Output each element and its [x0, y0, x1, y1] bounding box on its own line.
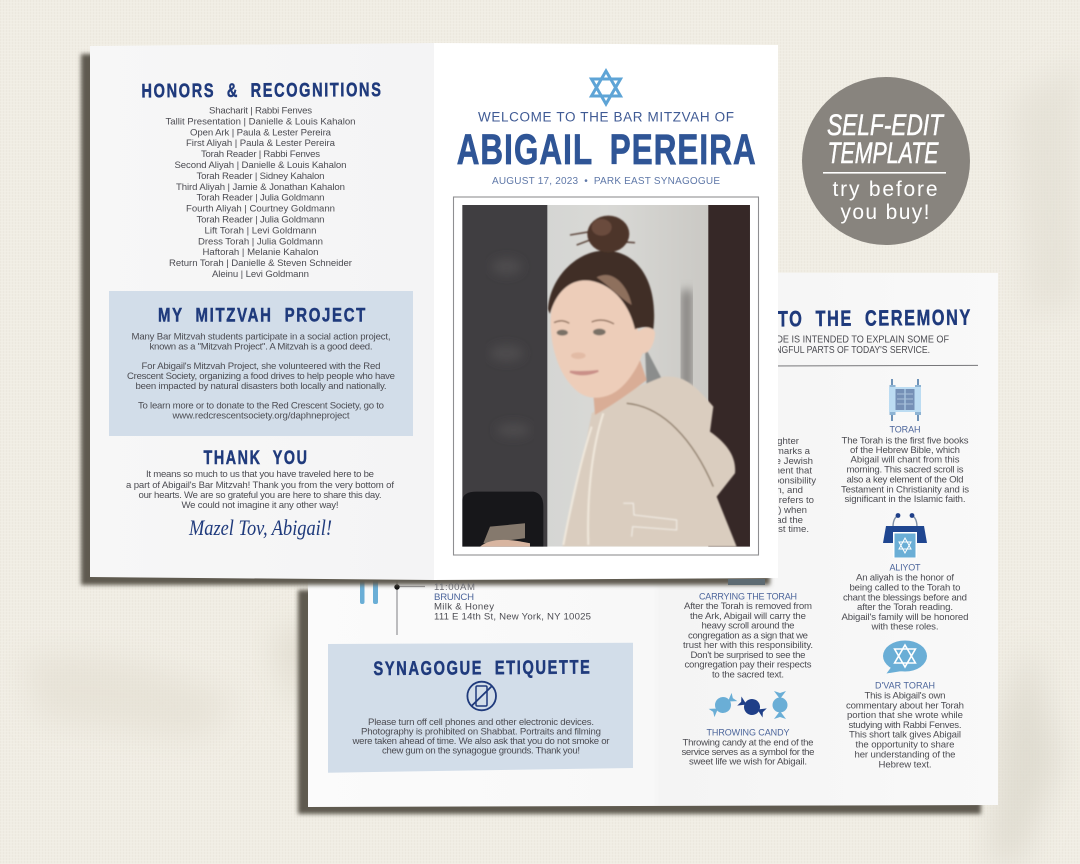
self-edit template badge: try before — [832, 178, 938, 201]
section: thank you: THANK YOU — [204, 447, 308, 469]
text: hidden middle column paragraph: you!) when — [760, 505, 807, 516]
section: honors and recognitions: Lift Torah | Levi Goldmann — [204, 225, 316, 236]
icon: torah scroll — [889, 379, 921, 421]
section: honors and recognitions: First Aliyah | Paula & Lester Pereira — [186, 138, 336, 149]
text: brunch schedule item: BRUNCH — [434, 592, 474, 603]
hair — [548, 251, 654, 329]
panel: front sheet left page — [90, 43, 434, 580]
hair behind neck — [644, 352, 662, 384]
self-edit template badge: TEMPLATE — [828, 137, 939, 170]
text: brunch schedule item — [434, 582, 591, 622]
icon: fork and knife — [360, 578, 378, 604]
section: thank you — [126, 447, 394, 540]
text: hidden middle column paragraph: in the Jewish — [758, 456, 813, 467]
face — [551, 277, 655, 398]
section: carrying the torah: Don't be surprised to see the — [690, 650, 806, 661]
heading: guide to the ceremony — [700, 305, 978, 366]
section: honors and recognitions: Torah Reader | Julia Goldmann — [196, 214, 324, 226]
section: carrying the torah: After the Torah is removed from — [684, 601, 812, 612]
section: honors and recognitions: Dress Torah | Julia Goldmann — [198, 236, 323, 247]
face details — [557, 330, 568, 336]
panel: back sheet — [308, 272, 998, 807]
section: honors and recognitions — [141, 79, 383, 280]
text: hidden middle column paragraph: son or daughter — [732, 436, 800, 447]
panel: synagogue etiquette: Photography is prohibited on Shabbat. Portraits and filming — [361, 726, 601, 738]
icon: speech bubble with star — [883, 640, 927, 674]
section: honors and recognitions: Return Torah | Danielle & Steven Schneider — [169, 258, 353, 269]
photo: girl in hoodie — [460, 203, 752, 550]
section: torah — [841, 379, 969, 505]
icon: star of david — [592, 71, 620, 104]
section: d'var torah: This is Abigail's own — [864, 691, 946, 702]
neck — [593, 350, 647, 415]
section: honors and recognitions: Torah Reader | Rabbi Fenves — [201, 149, 320, 160]
text: brunch schedule item: 11:00AM — [434, 582, 475, 593]
section: thank you: It means so much to us that you have traveled here to be — [146, 469, 374, 480]
section: honors and recognitions: Tallit Presentation | Danielle & Louis Kahalon — [166, 116, 356, 127]
section: carrying the torah — [683, 591, 813, 680]
panel: my mitzvah project: MY MITZVAH PROJECT — [158, 305, 367, 327]
text: hidden middle column paragraph — [732, 436, 816, 535]
section: carrying the torah: CARRYING THE TORAH — [699, 591, 797, 601]
panel: synagogue etiquette: SYNAGOGUE ETIQUETTE — [373, 657, 592, 680]
text: hidden middle column paragraph: the first time. — [754, 524, 809, 535]
section: d'var torah: D'VAR TORAH — [875, 681, 935, 691]
panel: my mitzvah project: been impacted by natural disasters both locally and nationally. — [136, 381, 386, 392]
icon: candies — [707, 690, 788, 720]
back sheet shadow — [298, 590, 981, 814]
heading: guide to the ceremony: THIS GUIDE IS INTENDED TO EXPLAIN SOME OF — [737, 335, 949, 346]
section: throwing candy: THROWING CANDY — [706, 728, 790, 738]
section: aliyot: ALIYOT — [890, 563, 921, 573]
section: honors and recognitions: Third Aliyah | Jamie & Jonathan Kahalon — [176, 182, 345, 193]
section: honors and recognitions: Haftorah | Melanie Kahalon — [202, 247, 318, 258]
heading: guide to the ceremony: TO THE CEREMONY — [778, 305, 972, 331]
panel: my mitzvah project: known as a "Mitzvah Project". A Mitzvah is a good deed. — [150, 342, 372, 352]
panel: my mitzvah project: www.redcrescentsociety.org/daphneproject — [172, 411, 350, 422]
panel: synagogue etiquette — [328, 643, 633, 773]
section: thank you: We could not imagine it any other way! — [182, 500, 338, 511]
self-edit template badge: SELF-EDIT — [827, 109, 945, 142]
section: honors and recognitions: Torah Reader | Sidney Kahalon — [196, 171, 324, 182]
text: date and venue: AUGUST 17, 2023 • PARK EAST SYNAGOGUE — [492, 176, 720, 187]
panel: synagogue etiquette: chew gum on the synagogue grounds. Thank you! — [382, 746, 580, 756]
section: torah: of the Hebrew Bible, which — [850, 445, 960, 456]
section: throwing candy: service serves as a symbol for the — [682, 747, 814, 758]
section: throwing candy: Throwing candy at the end of the — [682, 737, 814, 748]
section: d'var torah: commentary about her Torah — [846, 700, 964, 711]
icon: podium with star — [883, 513, 927, 558]
self-edit template badge — [802, 77, 970, 245]
section: carrying the torah: the Ark, Abigail will carry the — [690, 611, 806, 622]
section: thank you: a part of Abigail's Bar Mitzvah! Thank you from the very bottom of — [126, 480, 394, 491]
photo frame — [454, 197, 758, 555]
front sheet shadow — [81, 54, 770, 585]
section: honors and recognitions: Aleinu | Levi Goldmann — [212, 269, 309, 280]
section: aliyot: chant the blessings before and — [843, 592, 967, 603]
heading: guide to the ceremony: MEANINGFUL PARTS OF TODAY'S SERVICE. — [748, 345, 930, 356]
panel: my mitzvah project — [109, 291, 413, 436]
section: carrying the torah: heavy scroll around the — [702, 621, 794, 632]
script sign-off: Mazel Tov, Abigail! — [188, 515, 332, 540]
section: d'var torah: portion that she wrote while — [847, 710, 963, 721]
section: d'var torah: This short talk gives Abigail — [849, 730, 961, 741]
panel: synagogue etiquette: were taken ahead of time. We also ask that you do not smoke or — [352, 736, 610, 747]
section: honors and recognitions: Open Ark | Paula & Lester Pereira — [190, 127, 332, 138]
text: hidden middle column paragraph: commitment that — [741, 466, 812, 476]
section: aliyot: An aliyah is the honor of — [856, 573, 954, 584]
panel: front sheet cover page — [434, 43, 778, 580]
section: aliyot: after the Torah reading. — [857, 602, 953, 613]
hair bun — [587, 216, 629, 252]
self-edit template badge: you buy! — [840, 201, 930, 224]
section: d'var torah: studying with Rabbi Fenves. — [848, 720, 962, 731]
section: carrying the torah: congregation pay their respects — [684, 660, 812, 671]
text: hidden middle column paragraph: read the — [768, 515, 803, 526]
section: aliyot: Abigail's family will be honored — [842, 612, 968, 623]
title: name: ABIGAIL PEREIRA — [457, 126, 757, 174]
section: aliyot — [842, 513, 968, 633]
panel: my mitzvah project: Many Bar Mitzvah students participate in a social action project, — [132, 332, 390, 342]
section: honors and recognitions: Second Aliyah | Danielle & Louis Kahalon — [174, 160, 346, 171]
section: torah: The Torah is the first five books — [842, 435, 969, 446]
section: honors and recognitions: Torah Reader | Julia Goldmann — [196, 193, 324, 204]
section: honors and recognitions: HONORS & RECOGNITIONS — [141, 79, 383, 102]
section: throwing candy — [682, 690, 814, 768]
panel: my mitzvah project: For Abigail's Mitzvah Project, she volunteered with the Red — [142, 361, 380, 372]
text: hidden middle column paragraph: Mitzvah marks a — [740, 446, 811, 457]
section: d'var torah: the opportunity to share — [856, 740, 954, 751]
section: d'var torah — [846, 640, 964, 770]
panel: my mitzvah project: Crescent Society, organizing a food drives to help people who have — [127, 371, 395, 382]
section: aliyot: being called to the Torah to — [850, 582, 960, 593]
text: hidden middle column paragraph: which refers to — [751, 495, 814, 506]
panel: synagogue etiquette: Please turn off cell phones and other electronic devices. — [368, 717, 594, 728]
section: honors and recognitions: Fourth Aliyah | Courtney Goldmann — [186, 204, 335, 215]
panel: my mitzvah project: To learn more or to donate to the Red Crescent Society, go to — [138, 401, 384, 412]
section: carrying the torah: congregation as a sign that we — [688, 630, 808, 641]
section: aliyot: with these roles. — [870, 622, 938, 633]
section: d'var torah: her understanding of the — [854, 750, 956, 761]
section: torah: morning. This sacred scroll is — [846, 465, 964, 476]
text: welcome line: WELCOME TO THE BAR MITZVAH OF — [478, 110, 734, 125]
text: brunch schedule item: 111 E 14th St, New York, NY 10025 — [434, 612, 591, 622]
section: torah: Testament in Christianity and is — [841, 484, 969, 495]
section: thank you: our hearts. We are so grateful you are here to share this day. — [138, 490, 382, 501]
text: brunch schedule item: Milk & Honey — [434, 602, 494, 612]
section: carrying the torah: to the sacred text. — [712, 669, 784, 680]
section: carrying the torah: trust her with this responsibility. — [683, 640, 813, 651]
hoodie — [563, 376, 737, 547]
section: honors and recognitions: Shacharit | Rabbi Fenves — [209, 106, 312, 116]
section: throwing candy: sweet life we wish for Abigail. — [689, 757, 807, 768]
section: torah: Abigail will chant from this — [850, 455, 960, 466]
section: torah: also a key element of the Old — [846, 475, 964, 486]
text: hidden middle column paragraph: tradition, and — [748, 485, 803, 496]
section: torah: TORAH — [890, 425, 920, 435]
section: d'var torah: Hebrew text. — [878, 759, 932, 770]
text: hidden middle column paragraph: of responsibility — [750, 476, 816, 486]
timeline marker — [394, 578, 425, 635]
icon: no phones — [467, 682, 496, 710]
section: torah: significant in the Islamic faith. — [844, 494, 966, 505]
